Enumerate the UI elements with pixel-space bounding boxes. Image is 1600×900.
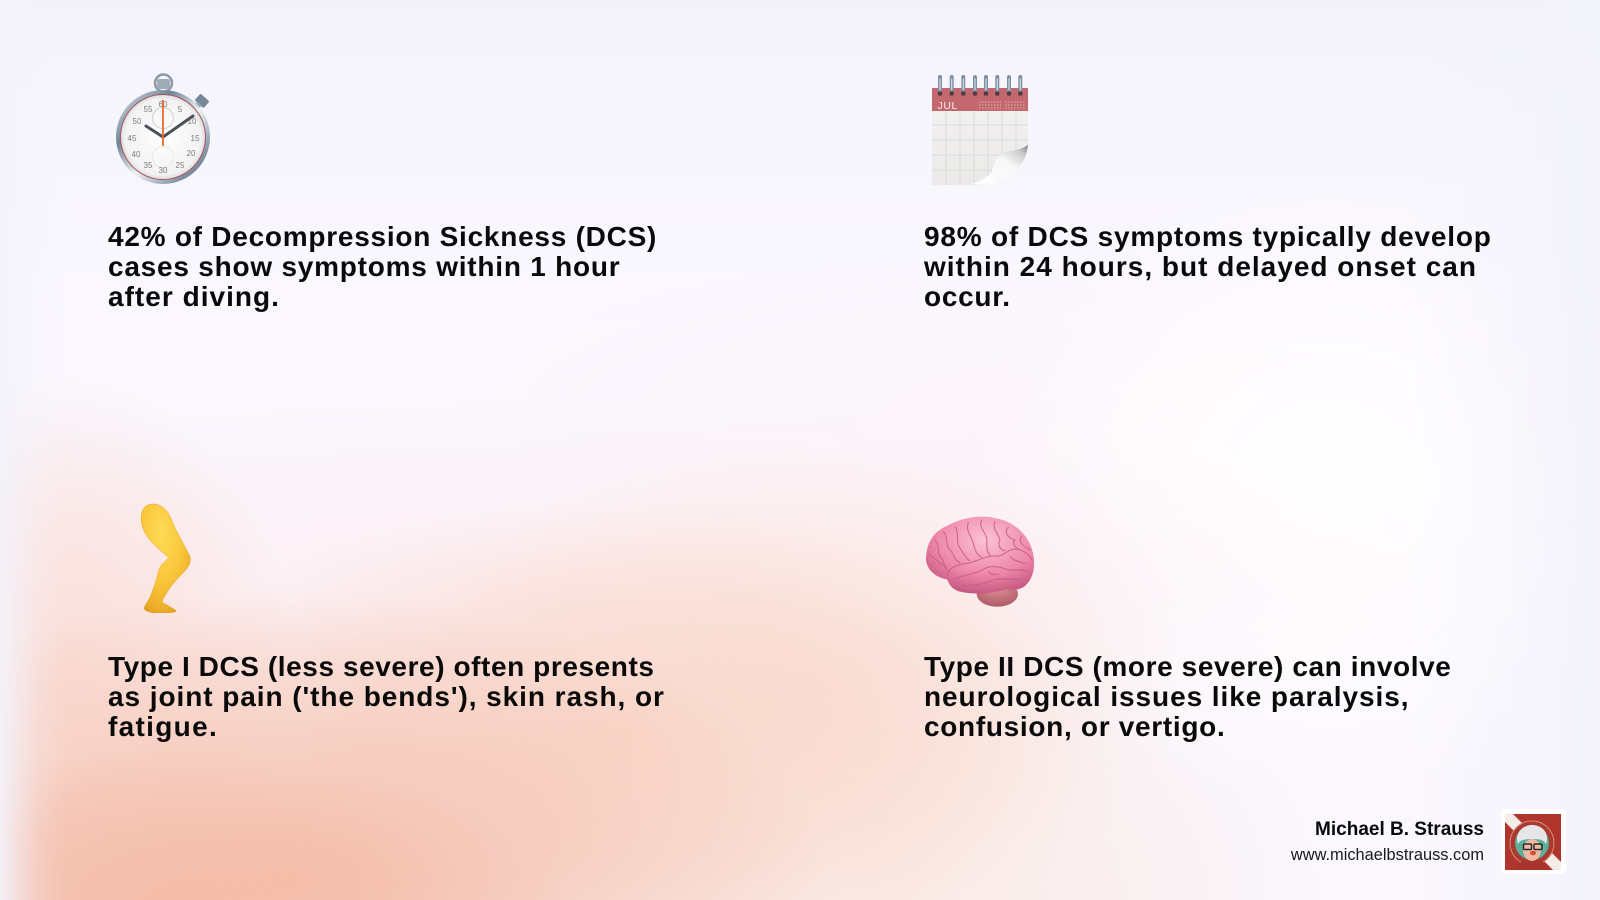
text: fact 3 <box>108 651 665 742</box>
text: fact 4: Type II DCS (more severe) can involve <box>924 651 1451 682</box>
text: fact 1 <box>108 221 657 312</box>
text: fact 2 <box>924 221 1492 312</box>
text: fact 1: after diving. <box>108 281 280 312</box>
text: fact 1: cases show symptoms within 1 hour <box>108 251 620 282</box>
icon: leg <box>140 504 191 614</box>
text: fact 3: as joint pain ('the bends'), skin rash, or <box>108 681 665 712</box>
text: fact 3: Type I DCS (less severe) often presents <box>108 651 655 682</box>
icon: stopwatch: 35 <box>144 161 153 170</box>
text: fact 2: occur. <box>924 281 1011 312</box>
text: fact 2: 98% of DCS symptoms typically develop <box>924 221 1492 252</box>
text: fact 4: neurological issues like paralysis, <box>924 681 1409 712</box>
icon: stopwatch: 25 <box>176 161 185 170</box>
icon: stopwatch: 5 <box>178 105 183 114</box>
icon: calendar: JUL <box>938 100 958 112</box>
text: fact 4 <box>924 651 1451 742</box>
icon: stopwatch: 40 <box>132 150 141 159</box>
text: fact 2: within 24 hours, but delayed onset can <box>924 251 1477 282</box>
icon: stopwatch <box>116 73 210 184</box>
icon: brain <box>926 516 1034 607</box>
icon: stopwatch: 50 <box>133 117 142 126</box>
author website: www.michaelbstrauss.com <box>1291 846 1484 864</box>
icon: stopwatch: 60 <box>159 100 168 109</box>
icon: calendar <box>932 75 1028 185</box>
icon: stopwatch: 10 <box>188 117 197 126</box>
icon: stopwatch: 20 <box>187 149 196 158</box>
text: fact 4: confusion, or vertigo. <box>924 711 1225 742</box>
logo: author portrait badge <box>1501 809 1566 874</box>
icon: stopwatch: 45 <box>128 134 137 143</box>
text: fact 1: 42% of Decompression Sickness (DCS) <box>108 221 657 252</box>
icon: stopwatch: 30 <box>159 166 168 175</box>
text: fact 3: fatigue. <box>108 711 218 742</box>
author name: Michael B. Strauss <box>1315 819 1484 840</box>
icon: stopwatch: 55 <box>144 105 153 114</box>
icon: stopwatch: 15 <box>191 134 200 143</box>
